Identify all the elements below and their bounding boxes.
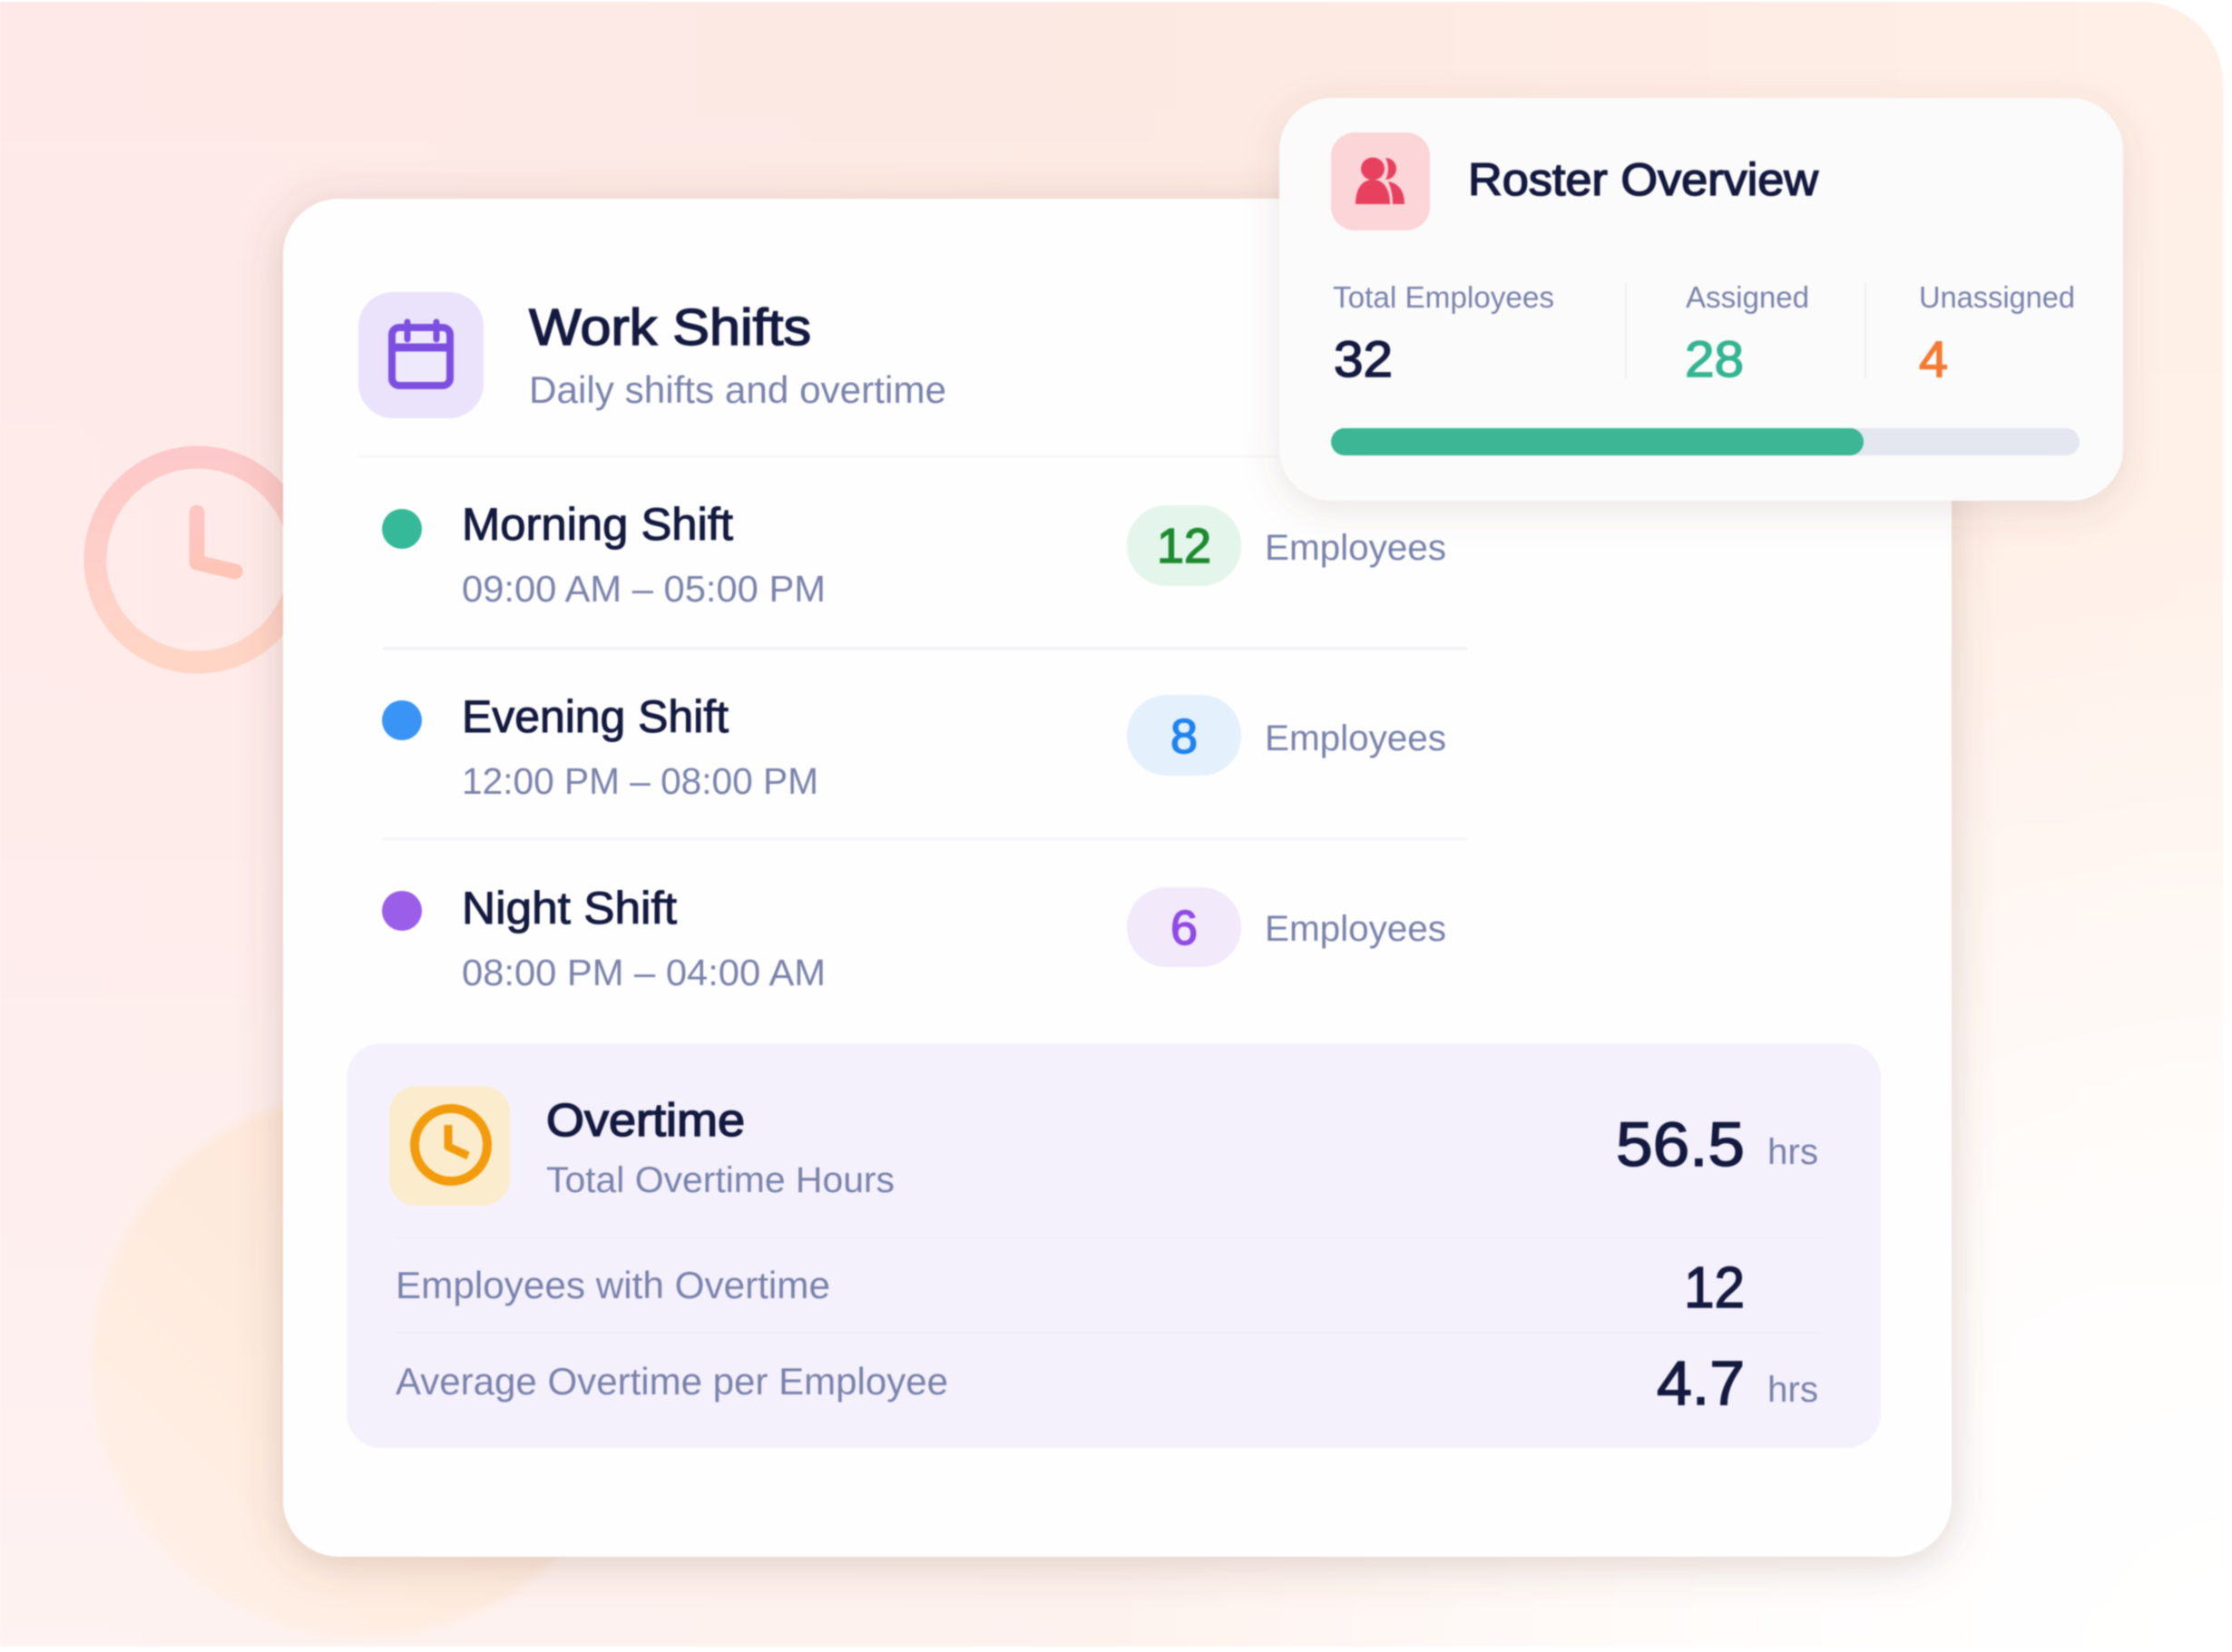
shift row: morning bbox=[382, 499, 1446, 610]
stat: unassigned bbox=[1919, 280, 2075, 387]
panel: roster overview card bbox=[1279, 98, 2123, 501]
row: employees with overtime: 12 bbox=[1684, 1255, 1745, 1320]
decorative peach circle bbox=[92, 1093, 636, 1637]
row: average overtime per employee bbox=[396, 1348, 1818, 1418]
row: employees with overtime: Employees with Overtime bbox=[396, 1264, 830, 1306]
row: average overtime per employee: Average Overtime per Employee bbox=[396, 1360, 948, 1403]
total overtime value: hrs bbox=[1767, 1132, 1818, 1172]
shift row: evening: Employees bbox=[1265, 718, 1446, 758]
panel: overtime bbox=[347, 1043, 1881, 1448]
stat: total employees: Total Employees bbox=[1333, 280, 1554, 314]
subheading: total overtime hours: Total Overtime Hours bbox=[546, 1160, 895, 1200]
decorative clock icon bbox=[95, 457, 300, 662]
shift row: evening bbox=[382, 691, 1446, 802]
shift row: morning: 09:00 AM – 05:00 PM bbox=[462, 568, 826, 610]
stat: total employees: 32 bbox=[1334, 330, 1393, 387]
shift row: morning: 12 bbox=[1157, 519, 1211, 573]
shift row: night: 6 bbox=[1170, 901, 1198, 955]
icon: people bbox=[1331, 132, 1430, 230]
heading: work shifts: Work Shifts bbox=[529, 298, 811, 357]
total overtime value: 56.5 bbox=[1616, 1109, 1745, 1179]
shift row: night: Employees bbox=[1265, 909, 1446, 949]
row: average overtime per employee: hrs bbox=[1767, 1370, 1818, 1410]
shift row: evening: 12:00 PM – 08:00 PM bbox=[462, 760, 818, 802]
shift row: evening: Evening Shift bbox=[462, 691, 729, 742]
subheading: Daily shifts and overtime bbox=[529, 368, 946, 411]
icon: overtime clock bbox=[389, 1086, 510, 1206]
shift row: night: 08:00 PM – 04:00 AM bbox=[462, 952, 826, 993]
shift row: night bbox=[382, 883, 1446, 993]
row: employees with overtime bbox=[396, 1255, 1745, 1320]
stat: assigned: Assigned bbox=[1686, 280, 1809, 314]
progress bar bbox=[1331, 428, 2080, 455]
stat: unassigned: Unassigned bbox=[1919, 280, 2075, 314]
panel: work shifts card bbox=[283, 199, 1952, 1557]
stat: assigned bbox=[1685, 280, 1809, 387]
heading: overtime: Overtime bbox=[546, 1094, 745, 1146]
shift row: evening: 8 bbox=[1170, 709, 1198, 764]
shift row: morning: Employees bbox=[1265, 528, 1446, 568]
stat: total employees bbox=[1333, 280, 1554, 387]
total overtime value bbox=[1616, 1109, 1818, 1179]
shift row: morning: Morning Shift bbox=[462, 499, 733, 550]
shift row: night: Night Shift bbox=[462, 883, 677, 934]
stat: unassigned: 4 bbox=[1919, 330, 1948, 387]
heading: roster overview: Roster Overview bbox=[1468, 154, 1819, 205]
icon: calendar bbox=[358, 292, 484, 418]
row: average overtime per employee: 4.7 bbox=[1657, 1348, 1745, 1418]
stat: assigned: 28 bbox=[1685, 330, 1744, 387]
